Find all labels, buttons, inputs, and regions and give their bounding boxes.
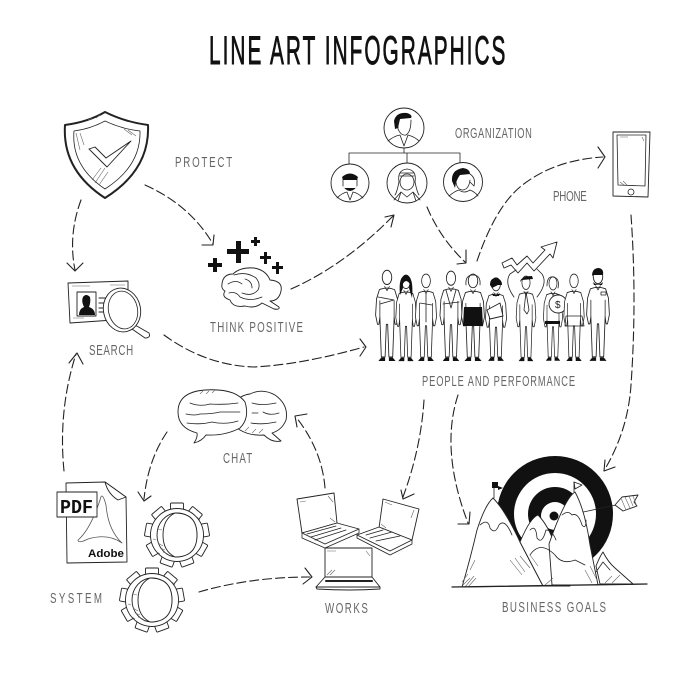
label: organization: ORGANIZATION: [455, 125, 532, 142]
arrow: search to people: [164, 335, 366, 367]
label: system: SYSTEM: [50, 590, 102, 607]
icon: shield: [65, 112, 148, 198]
mountains: [462, 498, 543, 587]
icon: gear top: [144, 503, 210, 567]
arrow: people to phone: [477, 147, 605, 261]
flags: [492, 482, 503, 490]
arrow in target: [560, 495, 638, 517]
arrow: protect to search: [67, 200, 83, 271]
person 9: [564, 274, 584, 361]
label: phone: PHONE: [553, 188, 587, 205]
icon: phone: [613, 132, 650, 197]
icon: laptops: [297, 493, 419, 590]
person 5 with skirt: [462, 274, 484, 361]
growth arrow: [502, 242, 557, 273]
target: [497, 456, 613, 572]
person 7 with raised arms: [508, 269, 544, 361]
icon: target and mountains: [452, 456, 647, 587]
arrow: people to works: [401, 400, 424, 499]
avatar: right: [444, 162, 482, 202]
arrow: gears to works: [199, 568, 312, 592]
laptop right: [357, 499, 419, 555]
laptop left: [297, 493, 359, 548]
laptop bottom: [316, 548, 380, 590]
pdf badge: PDF: [60, 497, 93, 519]
person 1: [376, 270, 398, 361]
avatar: left: [331, 164, 369, 202]
person 8 with coin: $: [555, 300, 561, 311]
person 10: [587, 268, 609, 361]
avatar: top manager: [384, 108, 424, 148]
org chart: [331, 108, 482, 203]
icon: pdf document: [57, 482, 127, 563]
icon: chat bubbles: [178, 390, 287, 443]
label: think positive: THINK POSITIVE: [210, 319, 303, 336]
icon: brain with plus signs: [208, 237, 283, 309]
people group: [376, 242, 609, 361]
icon: gear bottom: [119, 568, 185, 632]
person 6: [485, 278, 507, 361]
person 4: [440, 271, 462, 361]
person 8 with coin: [543, 277, 567, 361]
arrow: system to search: [62, 353, 83, 471]
label: chat: CHAT: [223, 450, 252, 467]
icon: pdf document: Adobe: [88, 548, 124, 560]
arrow: protect to think positive: [145, 185, 214, 245]
arrow: phone to business goals: [604, 215, 634, 471]
icon: id card with magnifier: [68, 281, 150, 338]
person 3: [415, 274, 437, 361]
label: business goals: BUSINESS GOALS: [502, 599, 606, 616]
arrow: chat to gears: [138, 432, 167, 501]
label: protect: PROTECT: [175, 154, 232, 171]
label: search: SEARCH: [89, 342, 133, 359]
arrow: works to chat: [295, 414, 325, 488]
arrow: think positive to organization: [291, 215, 394, 289]
arrow: people to business goals: [451, 395, 470, 524]
label: works: WORKS: [325, 600, 368, 617]
label: people and performance: PEOPLE AND PERFORMANCE: [422, 373, 575, 390]
avatar: middle: [387, 163, 427, 203]
arrow: organization to people: [427, 207, 466, 264]
person 2: [396, 275, 416, 361]
title: LINE ART INFOGRAPHICS: [209, 28, 505, 73]
